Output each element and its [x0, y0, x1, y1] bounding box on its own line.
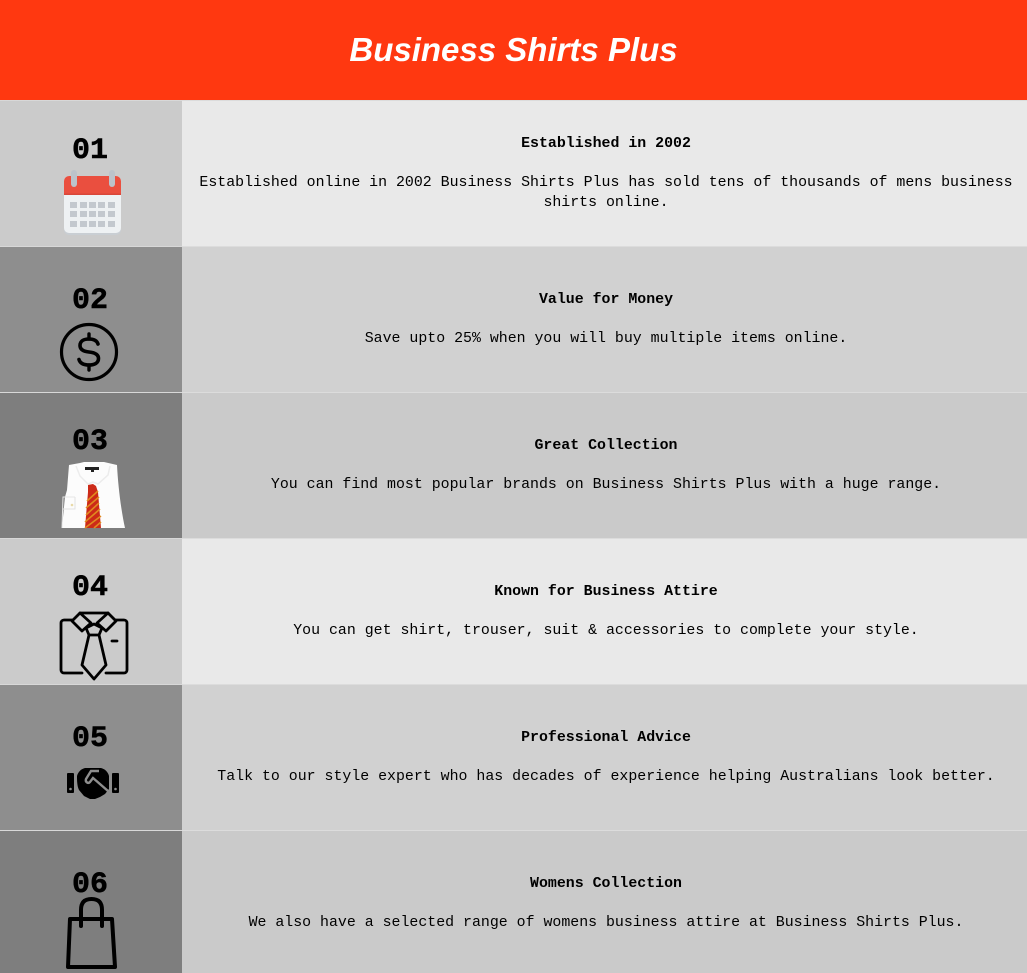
panel: 03 collection: [0, 392, 1027, 538]
panel: 06 womens: [0, 830, 1027, 973]
number 01: 01: [72, 134, 108, 168]
text: [199, 175, 1013, 211]
icon: handshake: [67, 768, 119, 799]
panel: 05 advice: [0, 684, 1027, 830]
panel: 02 value: [0, 246, 1027, 392]
heading: Known for Business Attire: [494, 584, 718, 600]
heading: Great Collection: [534, 438, 677, 454]
text: Talk to our style expert who has decades of experience helping Australians look better.: [217, 769, 995, 785]
number 02: 02: [72, 284, 108, 318]
heading: Value for Money: [539, 292, 673, 308]
icon: dollar coin: [60, 322, 118, 382]
heading: Established in 2002: [521, 136, 691, 152]
text: Save upto 25% when you will buy multiple items online.: [365, 331, 847, 347]
text: shirts online.: [543, 195, 669, 211]
number 05: 05: [72, 722, 108, 756]
text: You can get shirt, trouser, suit & accessories to complete your style.: [293, 623, 919, 639]
heading: Professional Advice: [521, 730, 691, 746]
panel: 01 established: [0, 100, 1027, 246]
text: You can find most popular brands on Business Shirts Plus with a huge range.: [271, 477, 941, 493]
icon: folded shirt outline: [60, 612, 128, 680]
header banner: [0, 0, 1027, 100]
icon: shopping bag: [66, 897, 117, 969]
number 04: 04: [72, 571, 108, 605]
number 06: 06: [72, 868, 108, 902]
heading: Womens Collection: [530, 876, 682, 892]
title: Business Shirts Plus: [349, 31, 678, 68]
icon: white shirt with tie: [62, 462, 125, 528]
icon: calendar: [64, 170, 121, 233]
text: We also have a selected range of womens business attire at Business Shirts Plus.: [249, 915, 963, 931]
text: Established online in 2002 Business Shirts Plus has sold tens of thousands of mens business: [199, 175, 1013, 191]
number 03: 03: [72, 425, 108, 459]
panel: 04 attire: [0, 538, 1027, 684]
